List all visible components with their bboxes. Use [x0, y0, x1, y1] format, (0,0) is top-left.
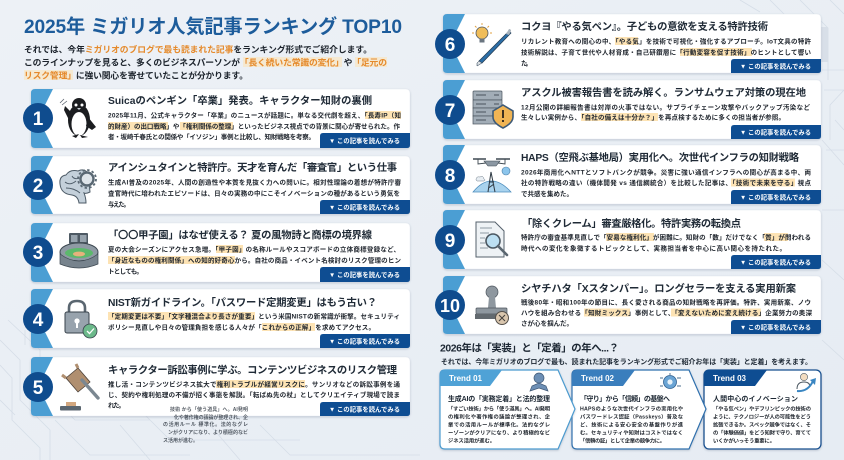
trend body: パスワードレス認証（Passkeys）普及な [580, 412, 684, 420]
icon: brain and gear [60, 170, 96, 203]
body: 生成AI普及の2025年、人間の創造性や本質を見抜く力への問いに。相対性理論の着想が特許庁審 [108, 178, 402, 186]
button: ▼ この記事を読んでみる [329, 136, 400, 145]
panel: trend 1 [440, 370, 575, 449]
body: 与えた。 [108, 200, 130, 208]
button: ▼ この記事を読んでみる [329, 202, 400, 212]
button [731, 59, 821, 73]
icon: shield and network [660, 373, 681, 388]
button: ▼ この記事を読んでみる [329, 336, 400, 346]
body [521, 36, 812, 68]
button [731, 190, 821, 204]
icon: server and shield [473, 91, 513, 128]
body [108, 178, 402, 208]
button [731, 255, 821, 269]
title: 2025年 ミガリオ人気記事ランキング TOP10 [24, 15, 402, 38]
stray overlay text: 技術 から「使う道具」へ。AI発明 [170, 406, 248, 413]
panel: article 7 [435, 80, 821, 139]
body: で共感を集めた。 [521, 189, 573, 198]
panel: article 8: 8 [445, 166, 455, 187]
panel: article 3: 3 [33, 243, 43, 264]
trend body: 「信頼の証」として企業の競争力に。 [580, 436, 665, 444]
trend heading: 人間中心のイノベーション [713, 394, 798, 403]
panel: article 4 [23, 289, 410, 348]
intro text: リスク管理」に強い関心を寄せていたことが分かります。 [24, 70, 248, 80]
label: trend 01: Trend 01 [449, 374, 483, 383]
icon: robot handshake [530, 373, 548, 391]
headline: シヤチハタ「Xスタンパー」。ロングセラーを支える実用新案 [521, 282, 797, 295]
headline: HAPS（空飛ぶ基地局）実用化へ。次世代インフラの知財戦略 [521, 151, 800, 164]
label: trend 02: Trend 02 [581, 374, 615, 383]
icon: lightbulb and pen [472, 23, 511, 66]
button: ▼ この記事を読んでみる [329, 270, 400, 279]
body [521, 168, 812, 198]
intro text: それでは、今年ミガリオのブログで最も読まれた記事をランキング形式でご紹介します。 [24, 44, 372, 54]
body [108, 244, 402, 276]
body: 12月公開の詳細報告書は対岸の火事ではない。サプライチェーン攻撃やバックアップ汚染など [521, 102, 810, 112]
button: ▼ この記事を読んでみる [740, 192, 811, 202]
stray overlay text: 化や著作権の議論が整理され、企 [174, 414, 248, 421]
button [320, 267, 410, 282]
button: ▼ この記事を読んでみる [740, 128, 811, 136]
panel: article 3 [23, 223, 410, 282]
body: 時代への変化を象徴するトピックとして、実務担当者を中心に高い関心を持たれた。 [521, 244, 786, 252]
intro text: このラインナップを見ると、多くのビジネスパーソンが「長く続いた常識の変化」や「足元の [24, 56, 387, 68]
trend body: の権利化や著作権の議論が整理され、企 [448, 412, 551, 420]
body [108, 312, 400, 332]
trend body: 業での活用ルールが標準化。法的なグレ [448, 420, 550, 428]
button: ▼ この記事を読んでみる [740, 258, 811, 266]
body: 生々しい実例から、「自社の備えは十分か？」を再点検するために多くの担当者が参照。 [521, 112, 785, 122]
body: 的財産）の出口戦略」や「権利関係の整理」といったビジネス視点での背景に関心が寄せられた。作 [108, 122, 400, 130]
panel: trend 3 [704, 370, 821, 449]
body: 2026年商用化へNTTとソフトバンクが競争。災害に強い通信インフラへの関心が高まる中、両 [521, 168, 812, 176]
body: 社の特許戦略の違い（機体開発 vs 通信網統合）を比較した記事は、「技術で未来を守る」視点 [521, 178, 812, 187]
body: ハウを組み合わせる「知財ミックス」事例として、「変えないために変え続ける」企業努力の奥深 [521, 308, 812, 317]
body: 査官時代に培われたエピソードは、日々の実務の中にこそイノベーションの種があるという勇気を [108, 188, 400, 198]
trend body: ーゾーンがクリアになり、より積極的なビ [448, 428, 550, 436]
panel: article 1: 1 [33, 109, 44, 130]
icon: stamp [475, 286, 508, 324]
section heading: 2026年は「実装」と「定着」の年へ...？ [440, 342, 619, 354]
section subtitle: それでは、今年ミガリオのブログで最も、読まれた記事をランキング形式でご紹介お年は「実装」と定着」を考えます。 [441, 357, 812, 366]
body [521, 102, 810, 122]
stray overlay text: ス活用が進む。 [163, 437, 198, 444]
button: ▼ この記事を読んでみる [329, 404, 400, 414]
panel: article 5: 5 [33, 378, 44, 399]
trend body: ように、テクノロジーが人の可能性をどう [713, 412, 811, 420]
headline: キャラクター訴訟事例に学ぶ。コンテンツビジネスのリスク管理 [108, 364, 398, 376]
body: 技術解説は、子育て世代や人材育成・自己研鑽層に「行動変容を促す技術」のヒントとして響い [521, 48, 812, 56]
icon: drone and tower [473, 159, 511, 192]
panel: article 2: 2 [33, 176, 43, 197]
stray overlay text [163, 406, 248, 444]
trend body: ジネス活用が進む。 [448, 436, 495, 444]
panel: article 8 [435, 145, 821, 204]
headline: アインシュタインと特許庁。天才を育んだ「審査官」という仕事 [108, 161, 397, 174]
body: トとしても。 [108, 268, 143, 276]
trend body: の「体験価値」をどう知財で守り、育てて [713, 428, 811, 436]
trend body [713, 404, 811, 444]
panel: article 10 [435, 276, 821, 334]
trend body [448, 404, 551, 444]
icon: gavel [60, 364, 98, 410]
trend body: 拡張できるか。スペック競争ではなく、そ [713, 420, 811, 428]
trend heading: 「守り」から「信頼」の基盤へ [580, 394, 670, 403]
button: ▼ この記事を読んでみる [740, 322, 811, 332]
trend body: ど、技術による安心安全の基盤作りが進 [580, 420, 684, 428]
body: 戦後80年・昭和100年の節目に、長く愛される商品の知財戦略を再評価。特許、実用新案、ノウ [521, 298, 811, 306]
body: リカレント教育への関心の中、「やる気」を技術で可視化・強化するアプローチ。IoT文具の特許 [521, 36, 812, 46]
button: ▼ この記事を読んでみる [740, 62, 811, 70]
button [320, 200, 410, 214]
stray overlay text: ンがクリアになり、より積極的なビ [168, 429, 248, 436]
icon: document and magnifier [476, 222, 507, 257]
button [320, 334, 410, 348]
panel: article 5 [23, 357, 410, 416]
body [521, 298, 812, 328]
headline: アスクル被害報告書を読み解く。ランサムウェア対策の現在地 [521, 86, 807, 99]
panel: article 2 [23, 156, 410, 214]
trend body: 「やる気ペン」やデフリンピックの技術の [713, 404, 811, 412]
body: ポリシー見直しや日々の管理負担を感じる人々が「これからの正解」を求めてアクセス。 [108, 322, 375, 332]
icon: person and arrow [797, 373, 816, 391]
panel: article 4: 4 [33, 310, 44, 331]
intro text [24, 44, 387, 80]
headline: NIST新ガイドライン。「パスワード定期変更」はもう古い？ [108, 296, 377, 309]
body [521, 232, 811, 252]
body: れた。 [108, 402, 125, 410]
icon: penguin [60, 98, 96, 138]
body: 夏の大会シーズンにアクセス急増。「甲子園」の名称ルールやスコアボードの立体商標登録など、 [108, 244, 400, 254]
panel: article 7: 7 [445, 101, 455, 122]
button [320, 402, 410, 416]
body: 「定期変更は不要」「文字種混合より長さが重要」という米国NISTの新常識が衝撃。セキュリティ [108, 312, 400, 320]
body: さが心を掴んだ。 [521, 318, 573, 328]
body: じ、契約や権利処理の不備が招く事態を解説。「転ばぬ先の杖」としてクリエイティブ現場で読ま [108, 390, 400, 399]
panel: article 6 [435, 14, 821, 73]
headline: 「除くクレーム」審査厳格化。特許実務の転換点 [522, 217, 741, 230]
trend body: HAPSのような次世代インフラの実用化や [580, 404, 683, 412]
panel: article 10: 10 [440, 296, 460, 316]
trend heading: 生成AIの「実務定着」と法的整理 [448, 394, 550, 403]
panel: article 1 [23, 89, 410, 148]
headline: Suicaのペンギン「卒業」発表。キャラクター知財の裏側 [108, 94, 372, 107]
button [731, 125, 821, 139]
body [108, 380, 400, 410]
button [320, 133, 410, 148]
body: 推し活・コンテンツビジネス拡大で権利トラブルが経営リスクに。サンリオなどの訴訟事例を通 [108, 380, 400, 388]
headline: コクヨ『やる気ペン』。子どもの意欲を支える特許技術 [521, 20, 768, 33]
panel: trend 2 [572, 370, 706, 449]
trend body: いくかがいっそう重要に。 [713, 436, 775, 444]
body [108, 110, 401, 141]
trend body: む。セキュリティや知財はコストではなく [580, 428, 683, 436]
body: 「身近なものの権利関係」への知的好奇心から。自社の商品・イベント名検討のリスク管理のヒン [108, 256, 402, 264]
headline: 「〇〇甲子園」はなぜ使える？ 夏の風物詩と商標の境界線 [108, 228, 373, 242]
trend body: 「すごい技術」から「使う道具」へ。AI発明 [448, 404, 550, 412]
label: trend 03: Trend 03 [713, 374, 747, 383]
icon: stadium [60, 233, 98, 268]
body: 者・坂崎千春氏との関係や「イソジン」事例と比較し、知財戦略を考察。 [108, 132, 315, 141]
panel: article 9: 9 [445, 231, 455, 252]
body: 2025年11月、公式キャラクター「卒業」のニュースが話題に。単なる交代劇を超え、「長寿IP（知 [108, 110, 401, 120]
stray overlay text: の活用ルール 標準化。法的なグレ [163, 421, 248, 428]
icon: padlock with check [65, 301, 97, 338]
panel: article 6: 6 [445, 35, 455, 56]
trend body [580, 404, 684, 444]
body: 特許庁の審査基準見直しで「安易な権利化」が困難に。知財の「数」だけでなく「質」が問われる [521, 232, 811, 242]
panel: article 9 [435, 210, 821, 269]
button [731, 320, 821, 334]
body: た。 [521, 60, 532, 68]
